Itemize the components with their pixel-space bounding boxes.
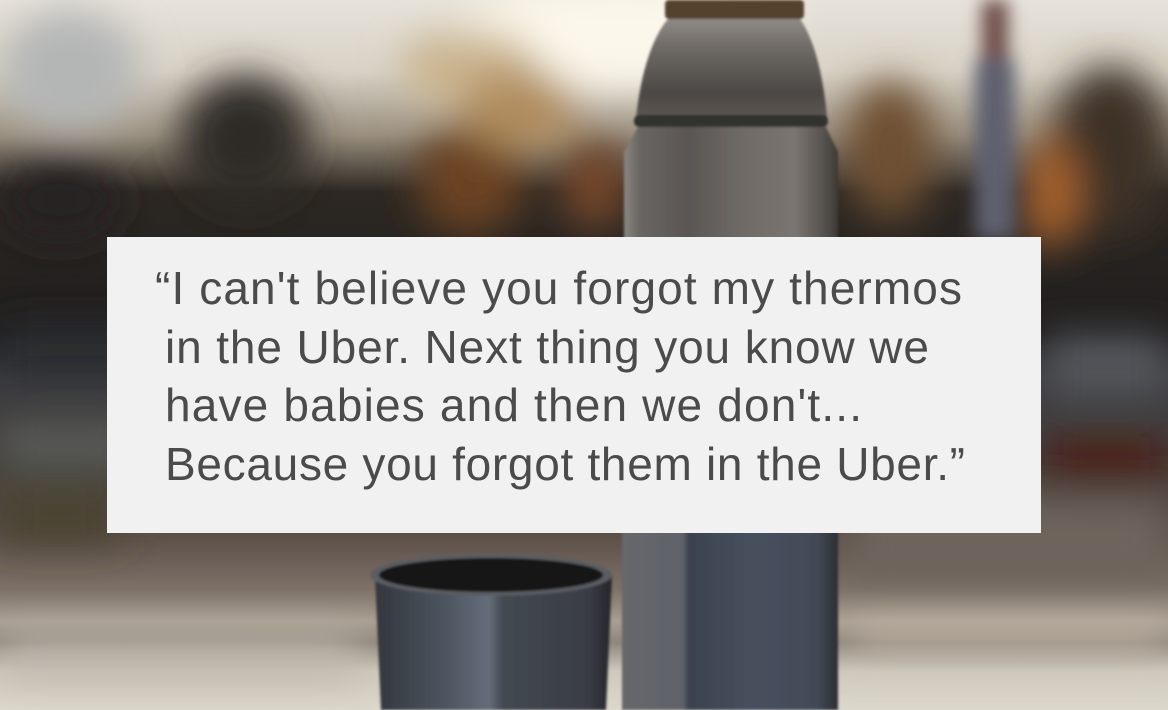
thermos lower body — [622, 530, 838, 710]
quote text: have babies and then we don't... — [165, 379, 862, 431]
quote text: in the Uber. Next thing you know we — [165, 321, 929, 373]
background mast — [975, 0, 1015, 240]
thermos cup — [370, 554, 612, 710]
quote text: Because you forgot them in the Uber.” — [165, 438, 965, 490]
thermos upper body — [624, 127, 838, 240]
quote text: “I can't believe you forgot my thermos — [155, 262, 962, 314]
thermos shoulder — [636, 19, 827, 118]
quote card — [107, 237, 1041, 533]
thermos cap top — [665, 0, 804, 19]
thermos bottle — [622, 0, 838, 710]
quote text — [155, 262, 965, 490]
